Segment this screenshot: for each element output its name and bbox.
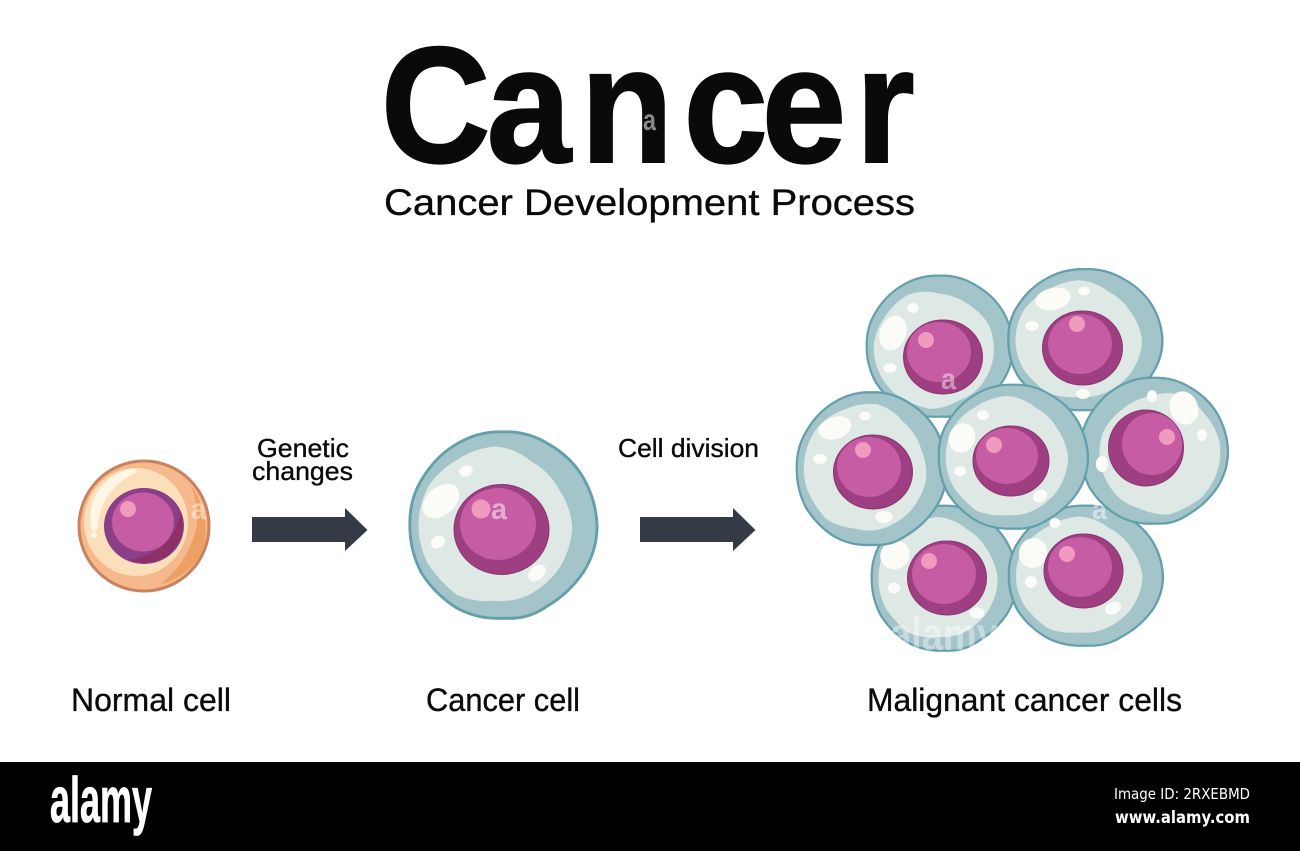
cell: top left: [854, 270, 1013, 426]
arrow: genetic changes: [252, 508, 368, 551]
cell: middle left: [794, 392, 947, 545]
cell: bottom left: [872, 506, 1017, 660]
normal cell illustration: [79, 461, 209, 591]
cancer cell illustration: a: [491, 493, 507, 526]
title: Cancer: [381, 12, 915, 197]
normal cell illustration: a: [191, 493, 206, 526]
subtitle: Cancer Development Process: [384, 182, 915, 223]
label: cancer cell: Cancer cell: [426, 682, 580, 718]
cell: bottom right: a: [1092, 493, 1107, 526]
cell: top right: [1008, 269, 1162, 410]
label: normal cell: Normal cell: [71, 682, 231, 718]
title watermark: a: [643, 104, 656, 137]
footer logo: alamy: [50, 764, 152, 836]
website: www.alamy.com: [1115, 808, 1250, 828]
cell: top left: a: [941, 363, 956, 396]
label: genetic changes: Genetic: [257, 433, 349, 463]
label: malignant cancer cells: Malignant cancer cells: [867, 682, 1182, 718]
label: genetic changes: [252, 433, 353, 486]
image id: Image ID: 2RXEBMD: [1114, 785, 1250, 803]
cell: right: [1081, 374, 1238, 529]
cell: bottom right: [1009, 493, 1163, 646]
footer bar: [0, 762, 1300, 851]
cancer cell illustration: [410, 432, 597, 618]
arrow: cell division: [640, 508, 756, 551]
malignant cancer cell cluster: [794, 269, 1238, 660]
cell: bottom left: alamy: [890, 608, 998, 660]
label: cell division: Cell division: [618, 433, 759, 463]
label: genetic changes: changes: [252, 456, 353, 486]
cell: center: [939, 385, 1088, 529]
